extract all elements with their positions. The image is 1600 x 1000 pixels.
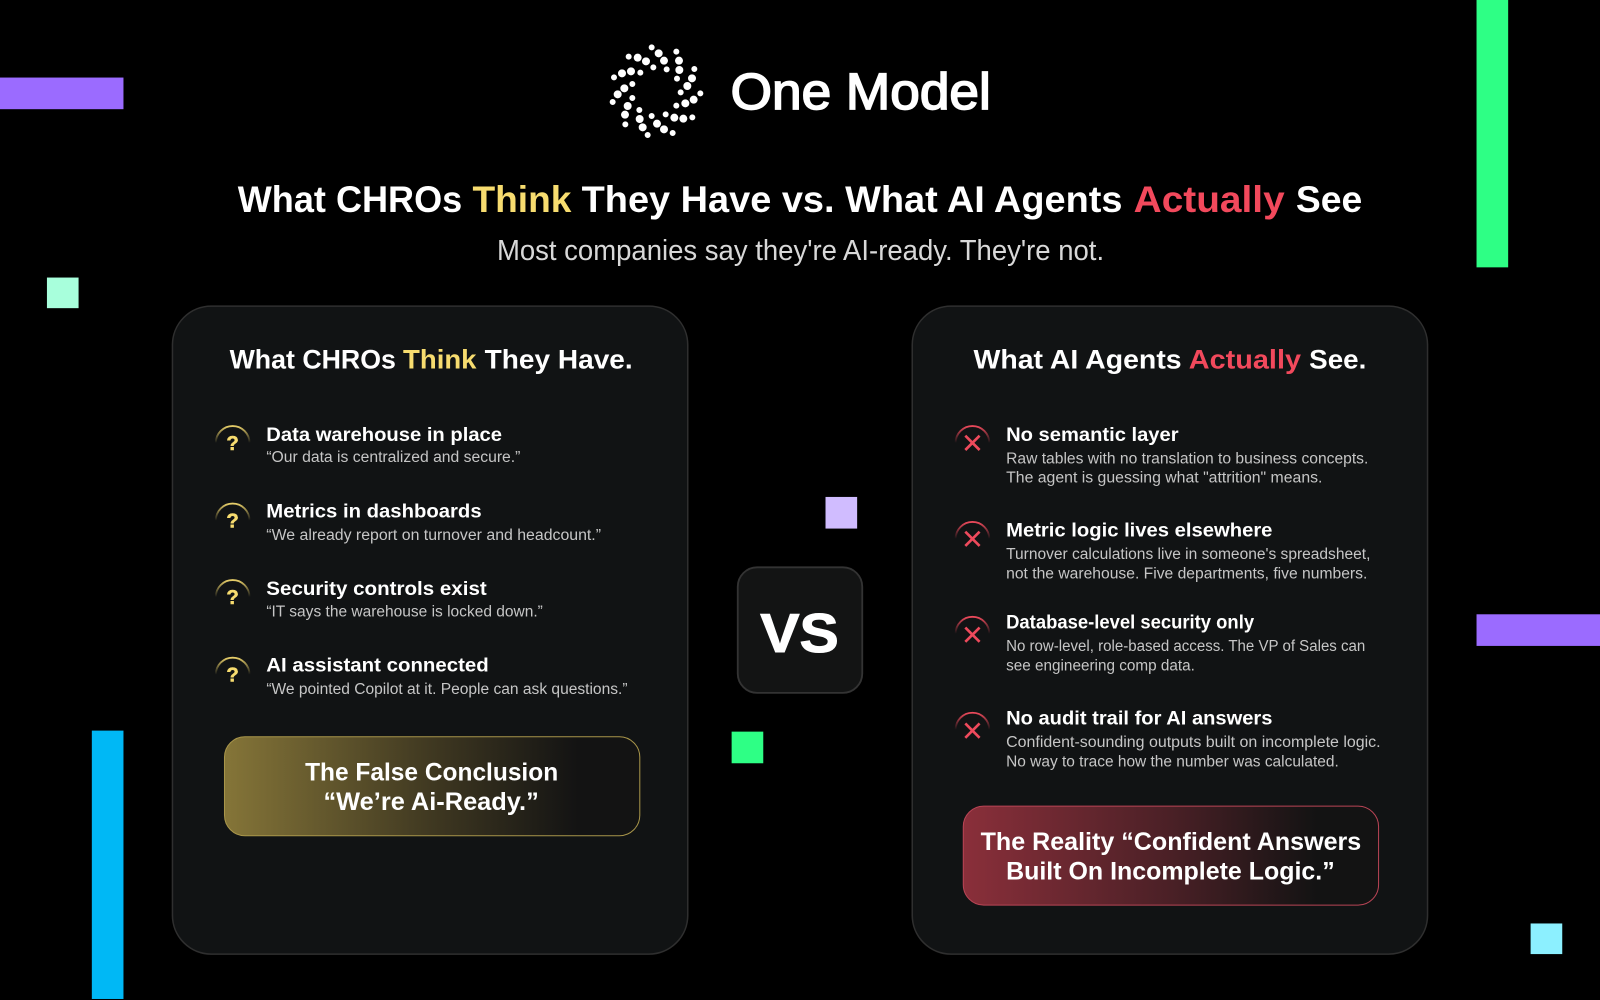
icon: dotted spiral — [610, 45, 703, 137]
item: metrics in dashboards: Metrics in dashboards — [266, 500, 482, 522]
title: Actually — [1134, 178, 1285, 220]
decorative block: mint square — [47, 278, 79, 308]
title — [238, 178, 1362, 220]
item: data warehouse — [216, 424, 520, 466]
item: AI assistant: AI assistant connected — [266, 654, 489, 676]
callout: the false conclusion — [224, 737, 640, 836]
item: data warehouse: Data warehouse in place — [266, 424, 502, 446]
VS badge — [738, 567, 862, 693]
item: no audit trail: No audit trail for AI answers — [1006, 707, 1272, 729]
VS badge: VS — [760, 602, 839, 664]
item: no semantic layer: Raw tables with no translation to business concepts. — [1006, 450, 1368, 467]
item: metrics in dashboards: ? — [226, 511, 239, 533]
panel heading — [230, 344, 633, 374]
panel: what AI agents actually see — [912, 306, 1428, 954]
item: metrics in dashboards — [216, 500, 601, 544]
item: security controls: Security controls exist — [266, 578, 487, 600]
item: metrics in dashboards: “We already report on turnover and headcount.” — [266, 527, 601, 544]
panel: what CHROs think they have — [172, 306, 688, 954]
item: metric logic: Metric logic lives elsewhere — [1006, 520, 1273, 542]
item: data warehouse: ? — [226, 433, 239, 455]
decorative block: purple left — [0, 78, 123, 109]
title: They Have vs. What AI Agents — [582, 178, 1122, 220]
callout: the reality: Built On Incomplete Logic.” — [1006, 858, 1335, 886]
callout: the false conclusion: The False Conclusion — [305, 759, 558, 787]
title: See — [1296, 178, 1362, 220]
panel heading: They Have. — [485, 344, 633, 374]
item: metric logic: not the warehouse. Five departments, five numbers. — [1006, 566, 1367, 583]
item: data warehouse: “Our data is centralized and secure.” — [266, 449, 520, 466]
panel heading: What CHROs — [230, 344, 396, 374]
item: database-level security — [956, 612, 1365, 674]
decorative block: green square — [732, 732, 763, 763]
panel heading: Think — [403, 344, 477, 374]
item: security controls — [216, 578, 543, 620]
item: no audit trail — [956, 707, 1381, 770]
panel heading: See. — [1309, 344, 1366, 374]
decorative block: blue bar — [92, 731, 123, 999]
decorative block: cyan square — [1531, 923, 1562, 954]
title: What CHROs — [238, 178, 462, 220]
item: AI assistant: ? — [226, 665, 239, 687]
subtitle: Most companies say they're AI-ready. They're not. — [497, 235, 1104, 267]
decorative block: green bar — [1477, 0, 1508, 267]
item: AI assistant — [216, 654, 628, 698]
panel heading: What AI Agents — [973, 344, 1182, 374]
title: Think — [472, 178, 572, 220]
item: no audit trail: Confident-sounding outputs built on incomplete logic. — [1006, 734, 1381, 751]
item: metric logic — [956, 520, 1370, 583]
panel heading: Actually — [1189, 344, 1301, 374]
logo: One Model — [610, 45, 991, 137]
item: no semantic layer — [956, 424, 1368, 487]
item: metric logic: Turnover calculations live in someone's spreadsheet, — [1006, 546, 1370, 563]
callout: the false conclusion: “We’re Ai-Ready.” — [323, 788, 539, 816]
item: AI assistant: “We pointed Copilot at it. People can ask questions.” — [266, 681, 628, 698]
callout: the reality — [963, 806, 1379, 905]
decorative block: purple right — [1477, 614, 1600, 646]
decorative block: lavender square — [826, 497, 857, 529]
item: no semantic layer: The agent is guessing what "attrition" means. — [1006, 470, 1322, 487]
item: security controls: ? — [226, 587, 239, 609]
item: security controls: “IT says the warehouse is locked down.” — [266, 603, 543, 620]
item: database-level security: No row-level, role-based access. The VP of Sales can — [1006, 638, 1365, 655]
logo wordmark: One Model — [731, 63, 991, 120]
item: no semantic layer: No semantic layer — [1006, 424, 1179, 446]
item: database-level security: Database-level security only — [1006, 612, 1254, 634]
callout: the reality: The Reality “Confident Answers — [981, 828, 1361, 856]
item: no audit trail: No way to trace how the number was calculated. — [1006, 753, 1339, 770]
panel heading — [973, 344, 1366, 374]
item: database-level security: see engineering comp data. — [1006, 657, 1195, 674]
